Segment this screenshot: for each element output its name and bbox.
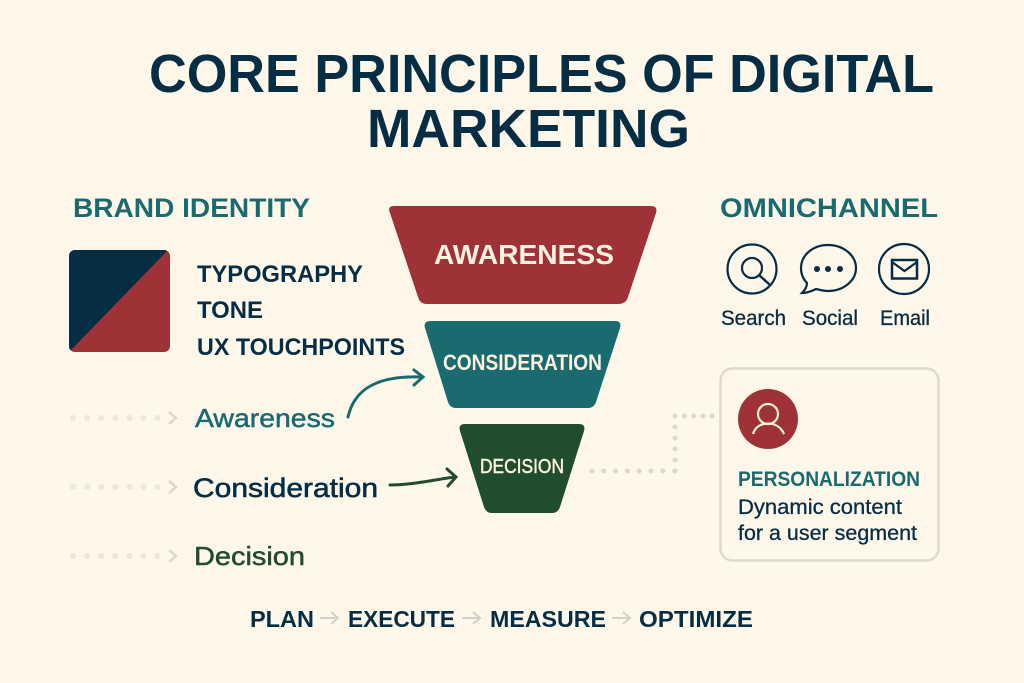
icon: email bbox=[879, 244, 929, 294]
personalization text bbox=[738, 496, 917, 545]
funnel: consideration bbox=[425, 321, 620, 408]
panel: personalization bbox=[720, 368, 938, 560]
icon: brand swatch bbox=[69, 250, 170, 352]
heading: omnichannel: OMNICHANNEL bbox=[720, 193, 938, 223]
label: decision: Decision bbox=[194, 541, 305, 571]
process flow: EXECUTE bbox=[348, 606, 455, 632]
icon: social bbox=[801, 245, 856, 293]
dotted line: consideration bbox=[73, 481, 176, 493]
title: CORE PRINCIPLES OF DIGITAL bbox=[149, 44, 934, 104]
arrow: consideration to decision bbox=[390, 469, 456, 486]
personalization text: Dynamic content bbox=[738, 496, 902, 519]
channel labels: Search bbox=[721, 307, 786, 330]
channel labels: Social bbox=[802, 307, 858, 330]
personalization heading: PERSONALIZATION bbox=[738, 468, 920, 491]
channel labels bbox=[721, 307, 930, 330]
title bbox=[149, 44, 934, 159]
funnel: awareness: AWARENESS bbox=[434, 239, 614, 270]
brand attributes list: TYPOGRAPHY bbox=[197, 261, 363, 288]
dotted line: awareness bbox=[73, 412, 176, 424]
process flow: MEASURE bbox=[490, 606, 606, 632]
arrow: awareness to consideration bbox=[348, 370, 423, 417]
process flow bbox=[250, 606, 753, 632]
brand attributes list: UX TOUCHPOINTS bbox=[197, 334, 405, 361]
funnel: decision: DECISION bbox=[480, 456, 564, 478]
dotted line: decision bbox=[73, 550, 176, 562]
label: consideration: Consideration bbox=[193, 473, 378, 503]
title: MARKETING bbox=[367, 99, 690, 159]
label: awareness: Awareness bbox=[195, 403, 335, 433]
process flow: OPTIMIZE bbox=[639, 606, 753, 632]
brand attributes list bbox=[197, 261, 405, 361]
dotted connector: decision to personalization bbox=[592, 416, 718, 471]
brand attributes list: TONE bbox=[197, 297, 263, 324]
icon: search bbox=[728, 244, 776, 294]
personalization text: for a user segment bbox=[738, 522, 917, 545]
funnel: consideration: CONSIDERATION bbox=[443, 350, 602, 375]
channel labels: Email bbox=[880, 307, 930, 330]
process flow: PLAN bbox=[250, 606, 314, 632]
heading: brand identity: BRAND IDENTITY bbox=[73, 193, 310, 223]
icon: user avatar bbox=[738, 389, 798, 449]
funnel: awareness bbox=[389, 206, 656, 304]
funnel: decision bbox=[460, 424, 584, 513]
